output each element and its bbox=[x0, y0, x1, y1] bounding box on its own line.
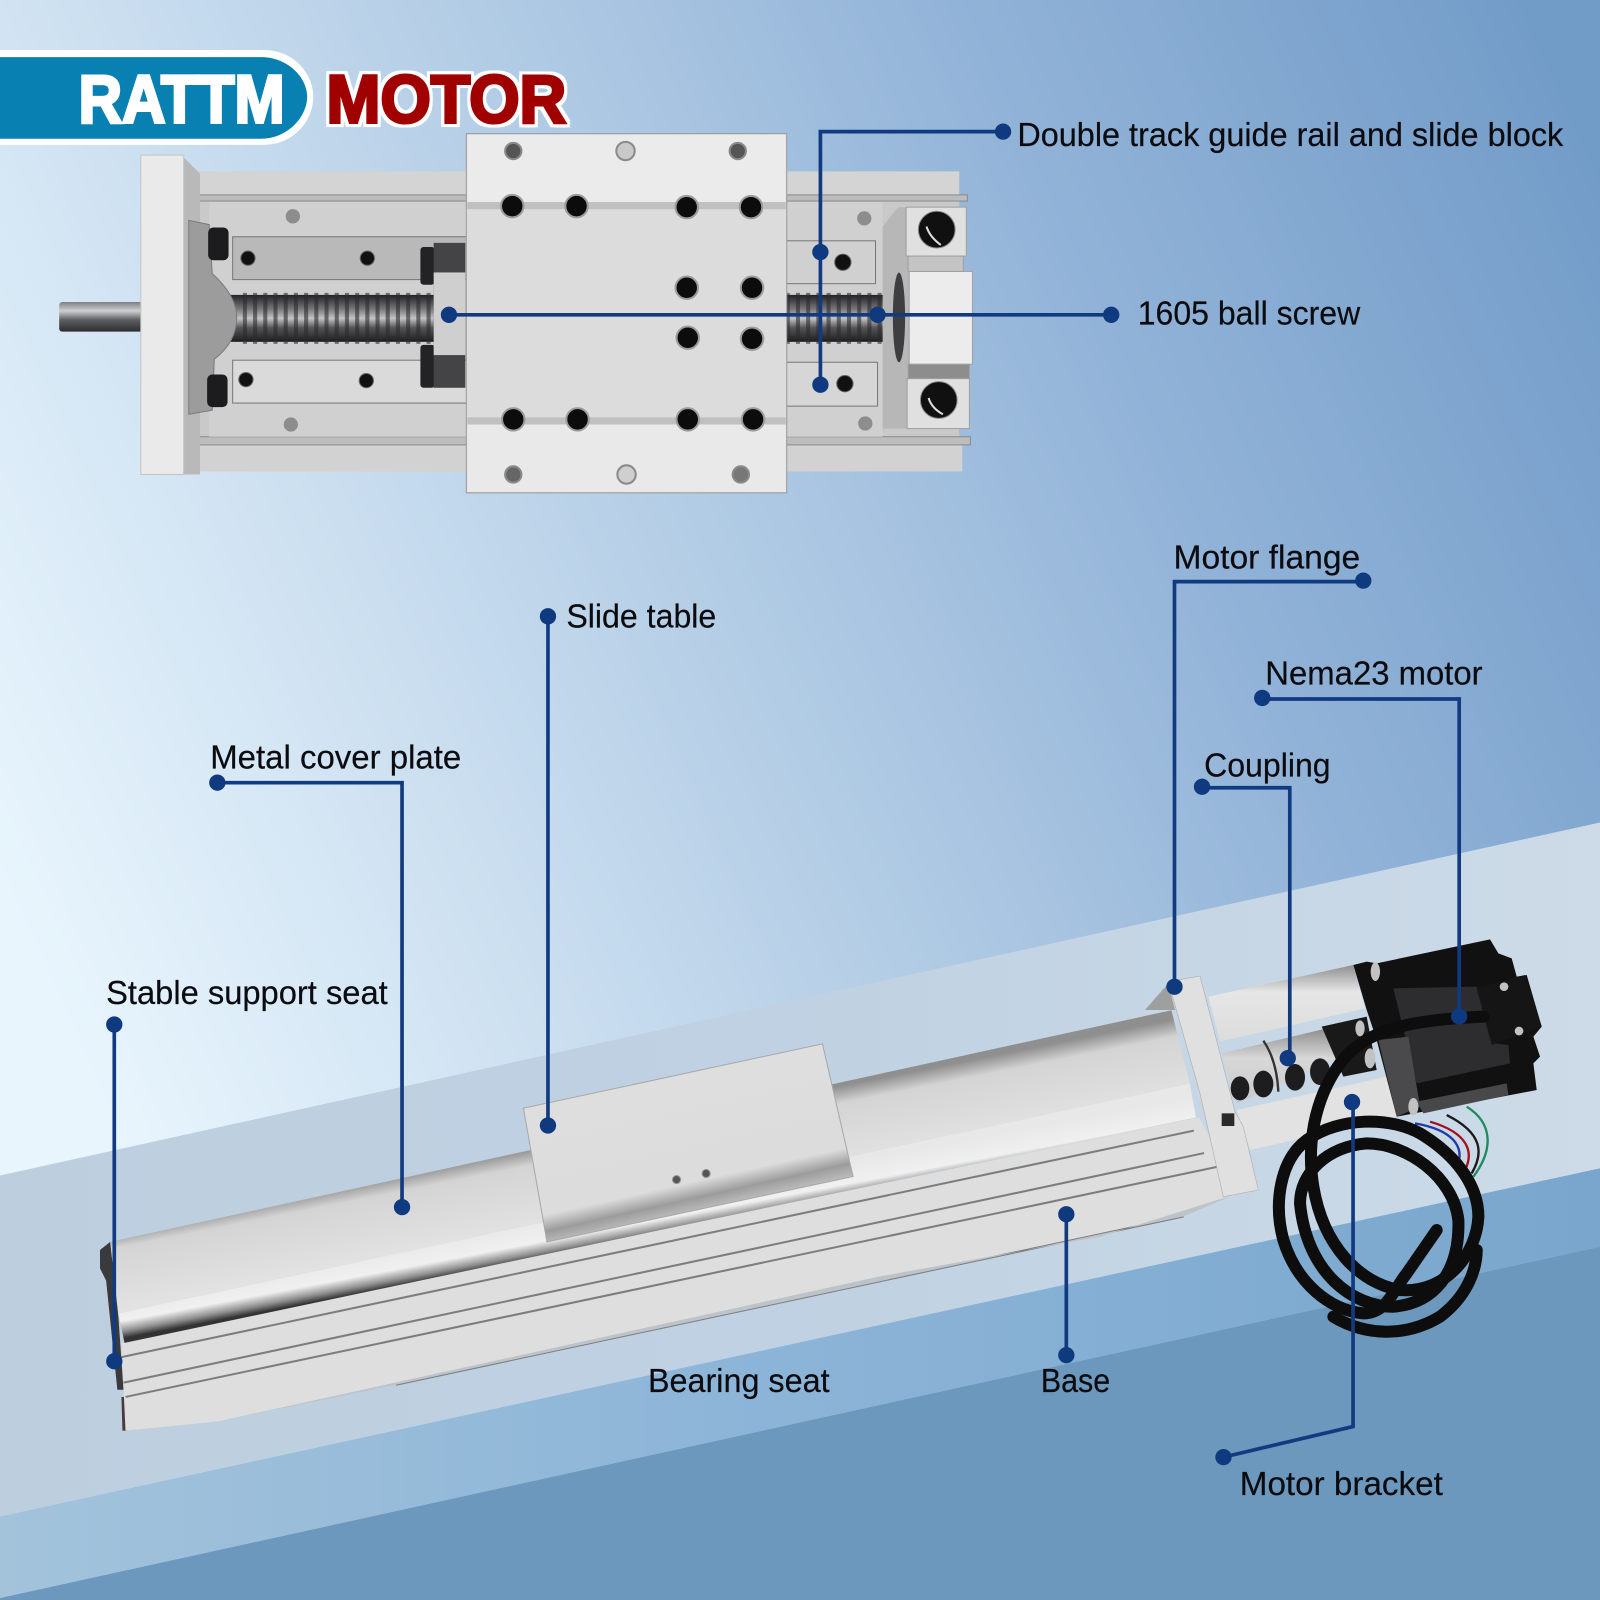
label: motor flange: Motor flange bbox=[1173, 539, 1360, 576]
label: base: Base bbox=[1041, 1363, 1110, 1400]
leader: metal cover plate bbox=[209, 774, 410, 1215]
label: coupling: Coupling bbox=[1204, 748, 1331, 785]
label: motor bracket: Motor bracket bbox=[1240, 1466, 1443, 1503]
slide table large holes bbox=[501, 195, 764, 431]
logo word MOTOR: MOTOR bbox=[327, 62, 566, 137]
flange side shadow bbox=[1145, 983, 1175, 1010]
product: top view of slide bbox=[59, 134, 972, 493]
label: double track guide rail: Double track guide rail and slide block bbox=[1017, 117, 1563, 154]
right bearing ring bbox=[893, 272, 905, 362]
lower outer rail bbox=[199, 445, 962, 471]
leader: motor bracket bbox=[1215, 1094, 1360, 1465]
right support blocks bbox=[906, 207, 972, 429]
left end plate side bbox=[182, 155, 200, 474]
slide table plate bbox=[466, 134, 787, 493]
leader: coupling bbox=[1194, 779, 1296, 1066]
upper outer rail bbox=[199, 171, 959, 195]
right support holes bbox=[918, 211, 957, 418]
product: angled view of slide bbox=[100, 939, 1542, 1431]
rail screws bbox=[239, 251, 853, 392]
label: slide table: Slide table bbox=[566, 599, 716, 636]
motor bottom ribbon bbox=[1417, 1083, 1508, 1113]
output shaft bbox=[59, 302, 143, 332]
left upper guide rail bbox=[233, 237, 467, 280]
background band: light diagonal bbox=[0, 822, 1600, 1516]
label: nema23 motor: Nema23 motor bbox=[1265, 656, 1483, 693]
leader: double track guide rail bbox=[812, 123, 1011, 393]
logo pill fill bbox=[0, 57, 307, 139]
lower rail lip bbox=[194, 437, 970, 445]
label: stable support seat: Stable support seat bbox=[106, 975, 388, 1012]
motor lower end plate bbox=[1378, 1037, 1420, 1117]
left end plate bbox=[141, 155, 184, 474]
ball screw thread right bbox=[786, 293, 898, 343]
logo bbox=[0, 50, 566, 145]
right upper guide rail bbox=[786, 241, 876, 284]
left end cap bbox=[100, 1242, 123, 1390]
tube under cover bbox=[118, 1084, 1196, 1343]
right support base bbox=[883, 207, 910, 429]
slide table grooves bbox=[467, 202, 786, 424]
left bearing flange bbox=[189, 220, 237, 414]
ball screw right bbox=[786, 295, 903, 342]
upper bracket bar bbox=[1208, 965, 1365, 1042]
slide table bottom strip bbox=[467, 424, 786, 492]
left lower guide rail bbox=[233, 360, 467, 403]
flange notch bbox=[1222, 1113, 1234, 1126]
coupling screws bbox=[1231, 1058, 1330, 1100]
leader: motor flange bbox=[1166, 572, 1371, 995]
coupling split line bbox=[1263, 1041, 1278, 1092]
motor wires bbox=[1415, 1107, 1488, 1177]
motor rear connector bbox=[1477, 975, 1542, 1045]
slide table holes bbox=[672, 1169, 710, 1184]
stepper motor textured centre bbox=[1393, 987, 1510, 1083]
background band: dark blue diagonal bbox=[0, 1247, 1600, 1600]
coupling bbox=[1222, 1028, 1343, 1103]
leader: stable support seat bbox=[106, 1016, 122, 1369]
base body bbox=[121, 1117, 1240, 1431]
motor cable bbox=[1279, 1017, 1483, 1332]
gap behind coupling bbox=[1322, 1017, 1377, 1077]
ball screw left bbox=[227, 295, 439, 342]
slide table small holes bbox=[505, 142, 749, 484]
floor holes bbox=[284, 209, 872, 432]
logo pill bbox=[0, 50, 313, 145]
ball screw thread left bbox=[243, 293, 439, 343]
metal cover plate bbox=[110, 1010, 1190, 1313]
screw nut bbox=[420, 243, 465, 388]
leader: slide table bbox=[540, 608, 556, 1134]
left end strip bbox=[121, 1397, 128, 1431]
flange bolts bbox=[207, 228, 229, 407]
leader: base bbox=[1058, 1206, 1074, 1363]
inner floor bbox=[209, 202, 883, 437]
rail line strips bbox=[121, 1131, 1219, 1397]
motor assembly bbox=[1145, 939, 1542, 1332]
slide table top strip bbox=[467, 135, 786, 202]
label: metal cover plate: Metal cover plate bbox=[210, 739, 461, 776]
motor screws bbox=[1355, 962, 1523, 1115]
slide table angled bbox=[523, 1044, 853, 1242]
leader: ball screw bbox=[441, 307, 1119, 323]
logo word RATTM: RATTM bbox=[79, 62, 285, 137]
base bottom chamfer bbox=[218, 1195, 1234, 1421]
base extrusion bbox=[194, 171, 959, 471]
upper rail lip bbox=[194, 195, 967, 201]
background band: mid blue diagonal bbox=[0, 1168, 1600, 1598]
right lower guide rail bbox=[786, 362, 878, 406]
lower bracket bar bbox=[1237, 1077, 1397, 1150]
leader: nema23 motor bbox=[1254, 690, 1467, 1024]
flange end plate bbox=[1168, 976, 1258, 1197]
label: ball screw: 1605 ball screw bbox=[1138, 295, 1361, 332]
label: bearing seat: Bearing seat bbox=[648, 1363, 830, 1400]
stepper motor body bbox=[1353, 939, 1542, 1117]
